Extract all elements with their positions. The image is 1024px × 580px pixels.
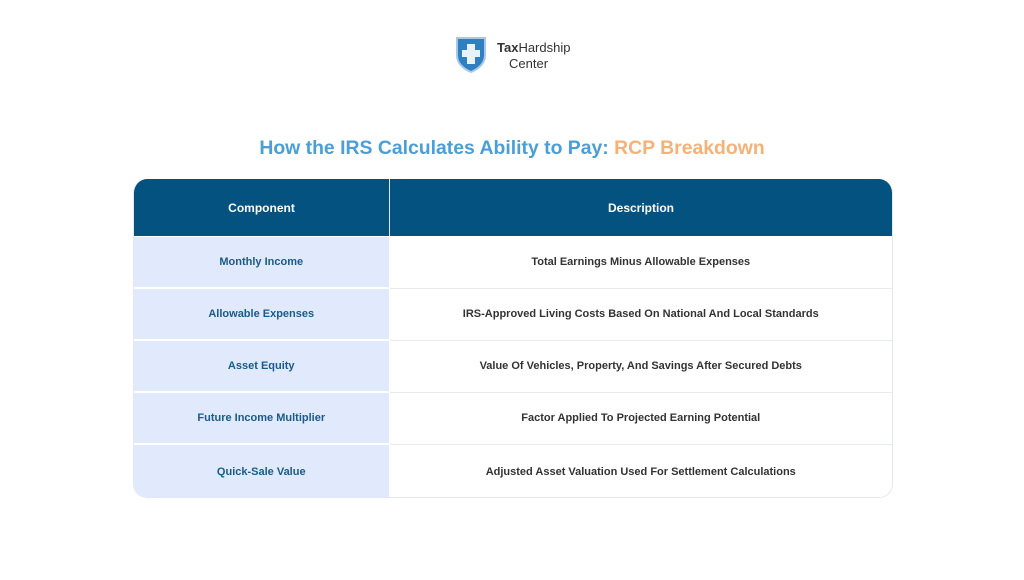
logo <box>456 37 570 73</box>
table rows: Factor Applied To Projected Earning Potential <box>521 412 760 424</box>
table <box>133 179 893 498</box>
table rows: Adjusted Asset Valuation Used For Settlement Calculations <box>486 466 796 478</box>
table rows: Total Earnings Minus Allowable Expenses <box>531 256 750 268</box>
logo text <box>497 40 570 71</box>
table rows: Allowable Expenses <box>208 308 314 320</box>
table rows: Value Of Vehicles, Property, And Savings After Secured Debts <box>480 360 802 372</box>
logo text: Center <box>509 56 548 71</box>
logo text: TaxHardship <box>497 40 570 55</box>
title: How the IRS Calculates Ability to Pay: RCP Breakdown <box>259 137 765 159</box>
table rows <box>134 237 892 497</box>
table header <box>134 179 892 236</box>
icon: shield <box>456 37 486 73</box>
table rows: Monthly Income <box>219 256 303 268</box>
table header: Component <box>228 200 295 214</box>
table rows: Future Income Multiplier <box>197 412 325 424</box>
table rows: Asset Equity <box>228 360 295 372</box>
table rows: IRS-Approved Living Costs Based On National And Local Standards <box>463 308 819 320</box>
table rows: Quick-Sale Value <box>217 466 306 478</box>
table header: Description <box>608 200 674 214</box>
